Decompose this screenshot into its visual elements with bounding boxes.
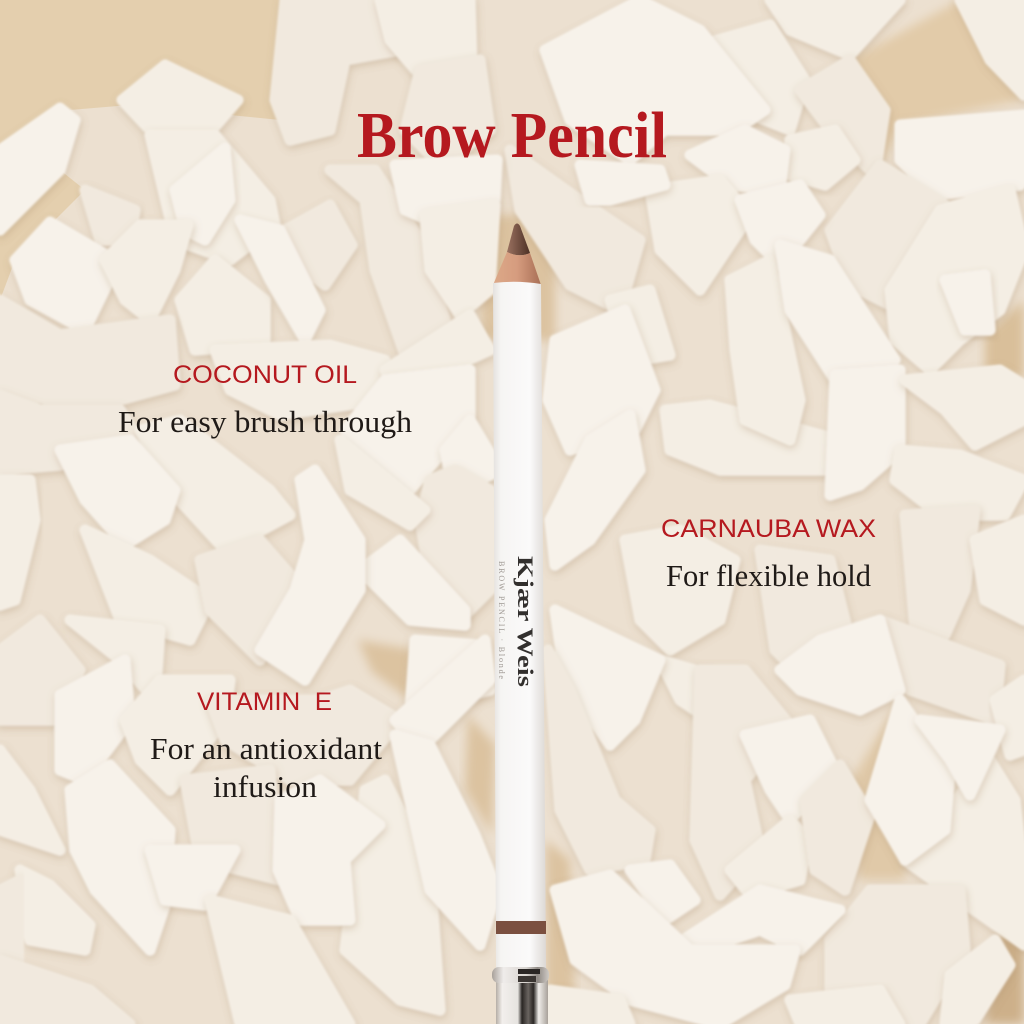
title: Brow Pencil [357, 99, 667, 172]
pencil [492, 224, 549, 1024]
pencil shade label: BROW PENCIL · Blonde [497, 561, 506, 679]
ingredient benefit: For easy brush through [118, 404, 412, 439]
pencil white barrel [493, 282, 546, 968]
ingredient benefit: For flexible hold [666, 558, 871, 593]
pencil wood cone [493, 252, 541, 285]
ingredient label: CARNAUBA WAX [661, 515, 876, 543]
ingredient benefit: For an antioxidant [150, 731, 382, 766]
pencil lead tip [507, 224, 530, 255]
ingredient benefit second line: infusion [213, 769, 317, 804]
pencil brand name: Kjær Weis [513, 556, 538, 688]
callout: carnauba wax [661, 515, 876, 593]
pencil silver ferrule [492, 967, 549, 1024]
callout: coconut oil [118, 361, 412, 439]
ingredient label: COCONUT OIL [173, 361, 357, 389]
callout: vitamin e [150, 688, 382, 804]
ingredient label: VITAMIN E [197, 688, 332, 716]
pencil brown band [496, 921, 546, 934]
